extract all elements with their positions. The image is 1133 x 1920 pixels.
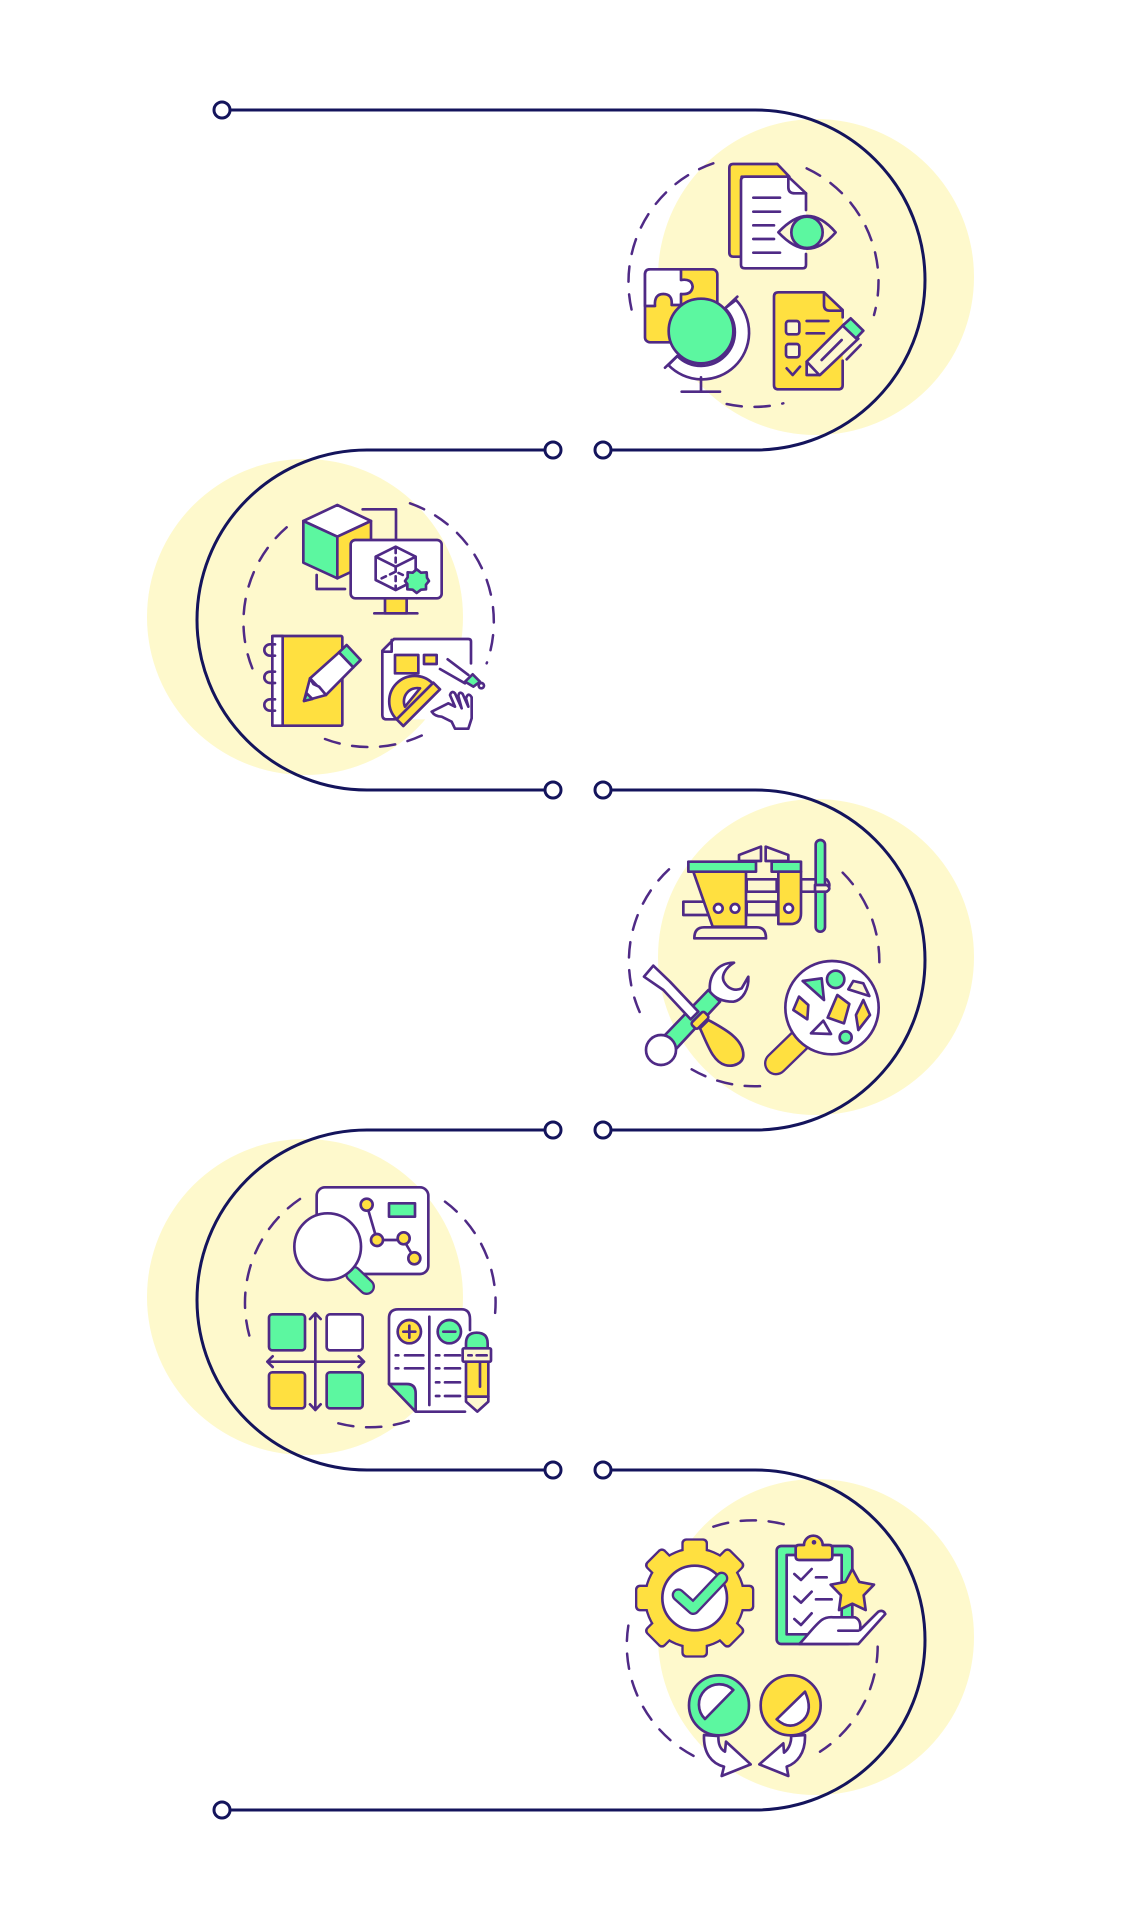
dashed ring 4 bbox=[245, 1199, 496, 1427]
dashed ring 2 bbox=[243, 503, 494, 747]
icon: gear with check bbox=[635, 1538, 754, 1658]
icon: magnifier with particles bbox=[776, 961, 879, 1063]
dashed ring 3 bbox=[629, 869, 879, 1086]
icon: pros and cons document with pencil bbox=[389, 1309, 491, 1412]
icon: clipboard with star and hand bbox=[777, 1536, 885, 1644]
icon: bench vise bbox=[683, 840, 829, 938]
timeline node markers bbox=[214, 102, 611, 1818]
background blobs bbox=[147, 119, 974, 1795]
panel: step 3 bbox=[629, 840, 879, 1086]
icon: quadrant matrix bbox=[267, 1313, 364, 1410]
icon: documents with eye bbox=[729, 164, 836, 268]
icon: swap circles with arrows bbox=[689, 1675, 821, 1776]
panel: step 5 bbox=[627, 1520, 885, 1776]
icon: notebook with pencil bbox=[264, 636, 361, 726]
panel: step 4 bbox=[245, 1187, 496, 1427]
icon: drafting page with protractor and hand bbox=[382, 639, 484, 729]
dashed ring 5 bbox=[627, 1520, 878, 1757]
icon: checklist with pencil bbox=[774, 292, 863, 389]
panel: step 2 bbox=[243, 503, 494, 747]
panel: step 1 bbox=[628, 163, 879, 407]
dashed ring 1 bbox=[628, 163, 879, 407]
timeline path bbox=[197, 110, 925, 1810]
icon: cube and monitor bbox=[303, 505, 442, 613]
icon: puzzle and globe bbox=[645, 269, 749, 392]
icon: wrench and screwdriver bbox=[644, 963, 748, 1066]
icon: chart under magnifier bbox=[294, 1187, 428, 1287]
